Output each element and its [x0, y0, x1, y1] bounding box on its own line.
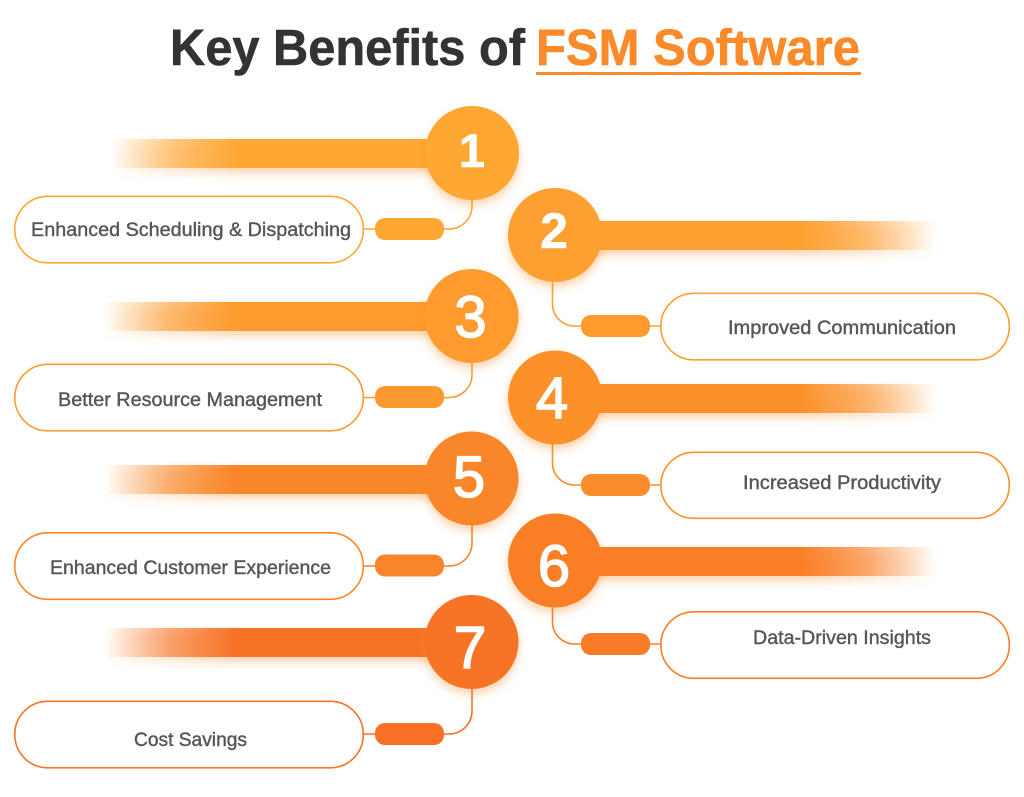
- title: Key Benefits of: [170, 19, 526, 76]
- number circle 2: [508, 188, 602, 282]
- bar 1: [112, 139, 442, 168]
- bar 4: [590, 384, 935, 413]
- label pill 1: [15, 196, 363, 263]
- number circle 3: [424, 269, 518, 363]
- label pill 2: [661, 293, 1009, 360]
- benefit 3: Better Resource Management: [15, 269, 519, 431]
- label pill 4: [661, 452, 1009, 518]
- benefit 1: Enhanced Scheduling & Dispatching: [15, 106, 519, 263]
- number circle 6: [508, 514, 602, 608]
- small pill 7: [375, 723, 444, 745]
- title: [170, 19, 861, 76]
- small pill 2: [581, 315, 650, 337]
- connector 7: [364, 686, 472, 734]
- bar 5: [105, 465, 442, 494]
- number 2: 2: [540, 203, 568, 259]
- benefit 2: Improved Communication: [508, 188, 1009, 360]
- small pill 4: [581, 474, 650, 496]
- bar 6: [590, 547, 935, 576]
- connector 4: [552, 442, 661, 485]
- small pill 1: [375, 218, 444, 240]
- small pill 6: [581, 633, 650, 655]
- benefit 4: Increased Productivity: [508, 350, 1009, 518]
- number 1: 1: [459, 124, 485, 177]
- label pill 7: [15, 701, 363, 768]
- label pill 5: [15, 533, 363, 599]
- connector 6: [552, 605, 661, 644]
- number 3: 3: [454, 285, 487, 350]
- label text 4: Increased Productivity: [743, 473, 942, 494]
- bar 7: [105, 628, 442, 657]
- number circle 5: [424, 432, 518, 526]
- number 4: 4: [536, 366, 568, 431]
- title highlight: FSM Software: FSM Software: [536, 19, 860, 76]
- small pill 5: [375, 554, 444, 576]
- benefit 7: Cost Savings: [15, 595, 519, 768]
- connector 1: [364, 198, 472, 229]
- label text 3: Better Resource Management: [58, 390, 323, 411]
- benefit 5: Enhanced Customer Experience: [15, 432, 519, 599]
- number circle 7: [424, 595, 518, 689]
- label pill 3: [15, 364, 363, 431]
- number 7: 7: [454, 615, 486, 681]
- label text 2: Improved Communication: [728, 318, 956, 339]
- number circle 4: [508, 350, 602, 444]
- small pill 3: [375, 386, 444, 408]
- number circle 1: [425, 106, 519, 200]
- connector 2: [552, 280, 661, 326]
- benefit 6: Data-Driven Insights: [508, 514, 1009, 678]
- number 6: 6: [538, 534, 570, 599]
- label text 1: Enhanced Scheduling & Dispatching: [31, 220, 351, 241]
- connector 3: [364, 360, 472, 398]
- label text 5: Enhanced Customer Experience: [50, 558, 331, 579]
- label text 6: Data-Driven Insights: [753, 628, 931, 649]
- bar 2: [590, 221, 935, 250]
- label text 7: Cost Savings: [134, 730, 247, 751]
- connector 5: [364, 523, 472, 566]
- bar 3: [105, 302, 442, 331]
- label pill 6: [661, 612, 1009, 678]
- number 5: 5: [453, 445, 485, 510]
